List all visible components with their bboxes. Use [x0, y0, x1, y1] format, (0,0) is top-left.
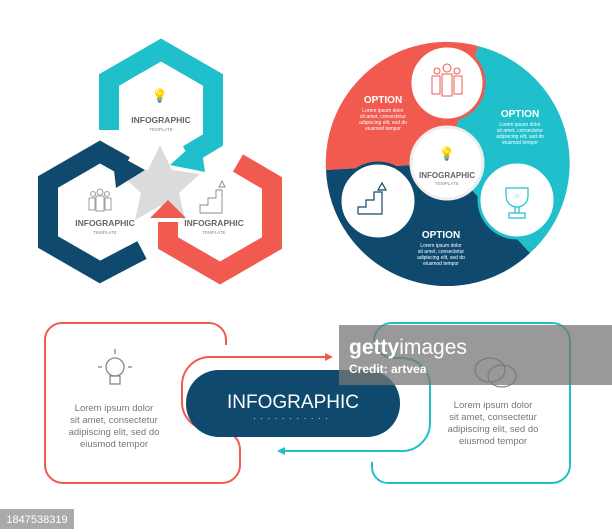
- arrow: left cyan: [277, 447, 285, 455]
- watermark: gettyimages: [349, 336, 467, 359]
- text: cyan option: eiusmod tempor: [502, 140, 538, 146]
- hex: red right: [150, 163, 272, 273]
- text: left: sit amet, consectetur: [70, 415, 158, 426]
- text: right hex: [184, 181, 244, 235]
- text: right: sit amet, consectetur: [449, 412, 537, 423]
- circle: center: 💡: [439, 146, 455, 161]
- text: navy option: sit amet, consectetur: [418, 249, 464, 255]
- watermark: Credit: artvea: [349, 362, 427, 376]
- circle: center: [411, 127, 483, 199]
- circle: chart: [340, 163, 416, 239]
- circle: trophy: ☆: [514, 192, 520, 200]
- watermark: [339, 325, 612, 385]
- text: navy option: Lorem ipsum dolor: [420, 243, 462, 249]
- segment: red: [326, 42, 478, 170]
- text: red option: [359, 95, 407, 132]
- text: navy option: OPTION: [422, 230, 460, 241]
- text: right: [448, 400, 538, 447]
- pill: infographic: INFOGRAPHIC: [227, 392, 359, 413]
- text: navy option: adipiscing elit, sed do: [417, 255, 465, 261]
- text: cyan option: [496, 109, 544, 146]
- hex: navy left: [48, 152, 145, 272]
- text: red option: OPTION: [364, 95, 402, 106]
- red box: [45, 323, 325, 483]
- text: red option: sit amet, consectetur: [360, 114, 406, 120]
- panel: circular options: [326, 42, 570, 286]
- segment: navy: [326, 163, 530, 286]
- circle: trophy: [479, 162, 555, 238]
- circle: people: [410, 46, 484, 120]
- id tag: [0, 509, 74, 529]
- text: left: eiusmod tempor: [80, 439, 148, 450]
- text: right: adipiscing elit, sed do: [448, 424, 538, 435]
- text: cyan option: adipiscing elit, sed do: [496, 134, 544, 140]
- pill: infographic: [186, 370, 400, 437]
- text: cyan option: Lorem ipsum dolor: [499, 122, 541, 128]
- text: cyan option: OPTION: [501, 109, 539, 120]
- arrow: right red: [325, 353, 333, 361]
- hex: cyan top: [109, 50, 213, 172]
- id tag: 1847538319: [6, 514, 68, 526]
- circle: center: TEMPLATE: [435, 181, 459, 186]
- text: top hex: TEMPLATE: [149, 127, 173, 132]
- text: red option: Lorem ipsum dolor: [362, 108, 404, 114]
- panel: bottom two-way: [45, 323, 570, 483]
- text: right hex: TEMPLATE: [202, 230, 226, 235]
- circle: center: INFOGRAPHIC: [419, 171, 475, 180]
- text: left hex: [75, 189, 135, 235]
- text: left hex: TEMPLATE: [93, 230, 117, 235]
- pill: infographic: ...........: [253, 412, 333, 421]
- text: navy option: [417, 230, 465, 267]
- text: left: Lorem ipsum dolor: [75, 403, 153, 414]
- segment: cyan: [447, 46, 570, 253]
- text: left hex: INFOGRAPHIC: [75, 218, 135, 228]
- text: top hex: [131, 88, 191, 132]
- cyan box: [285, 323, 570, 483]
- text: navy option: eiusmod tempor: [423, 261, 459, 267]
- text: red option: adipiscing elit, sed do: [359, 120, 407, 126]
- panel: hexagon cycle: [48, 50, 272, 273]
- center star: [120, 145, 200, 220]
- text: left: adipiscing elit, sed do: [69, 427, 159, 438]
- text: right hex: INFOGRAPHIC: [184, 218, 244, 228]
- text: top hex: 💡: [152, 88, 168, 103]
- text: right: eiusmod tempor: [459, 436, 527, 447]
- text: right: Lorem ipsum dolor: [454, 400, 532, 411]
- icon: chat: [475, 358, 516, 387]
- text: top hex: INFOGRAPHIC: [131, 115, 191, 125]
- text: cyan option: sit amet, consectetur: [497, 128, 543, 134]
- icon: bulb: [98, 349, 132, 384]
- text: left: [69, 403, 159, 450]
- text: red option: eiusmod tempor: [365, 126, 401, 132]
